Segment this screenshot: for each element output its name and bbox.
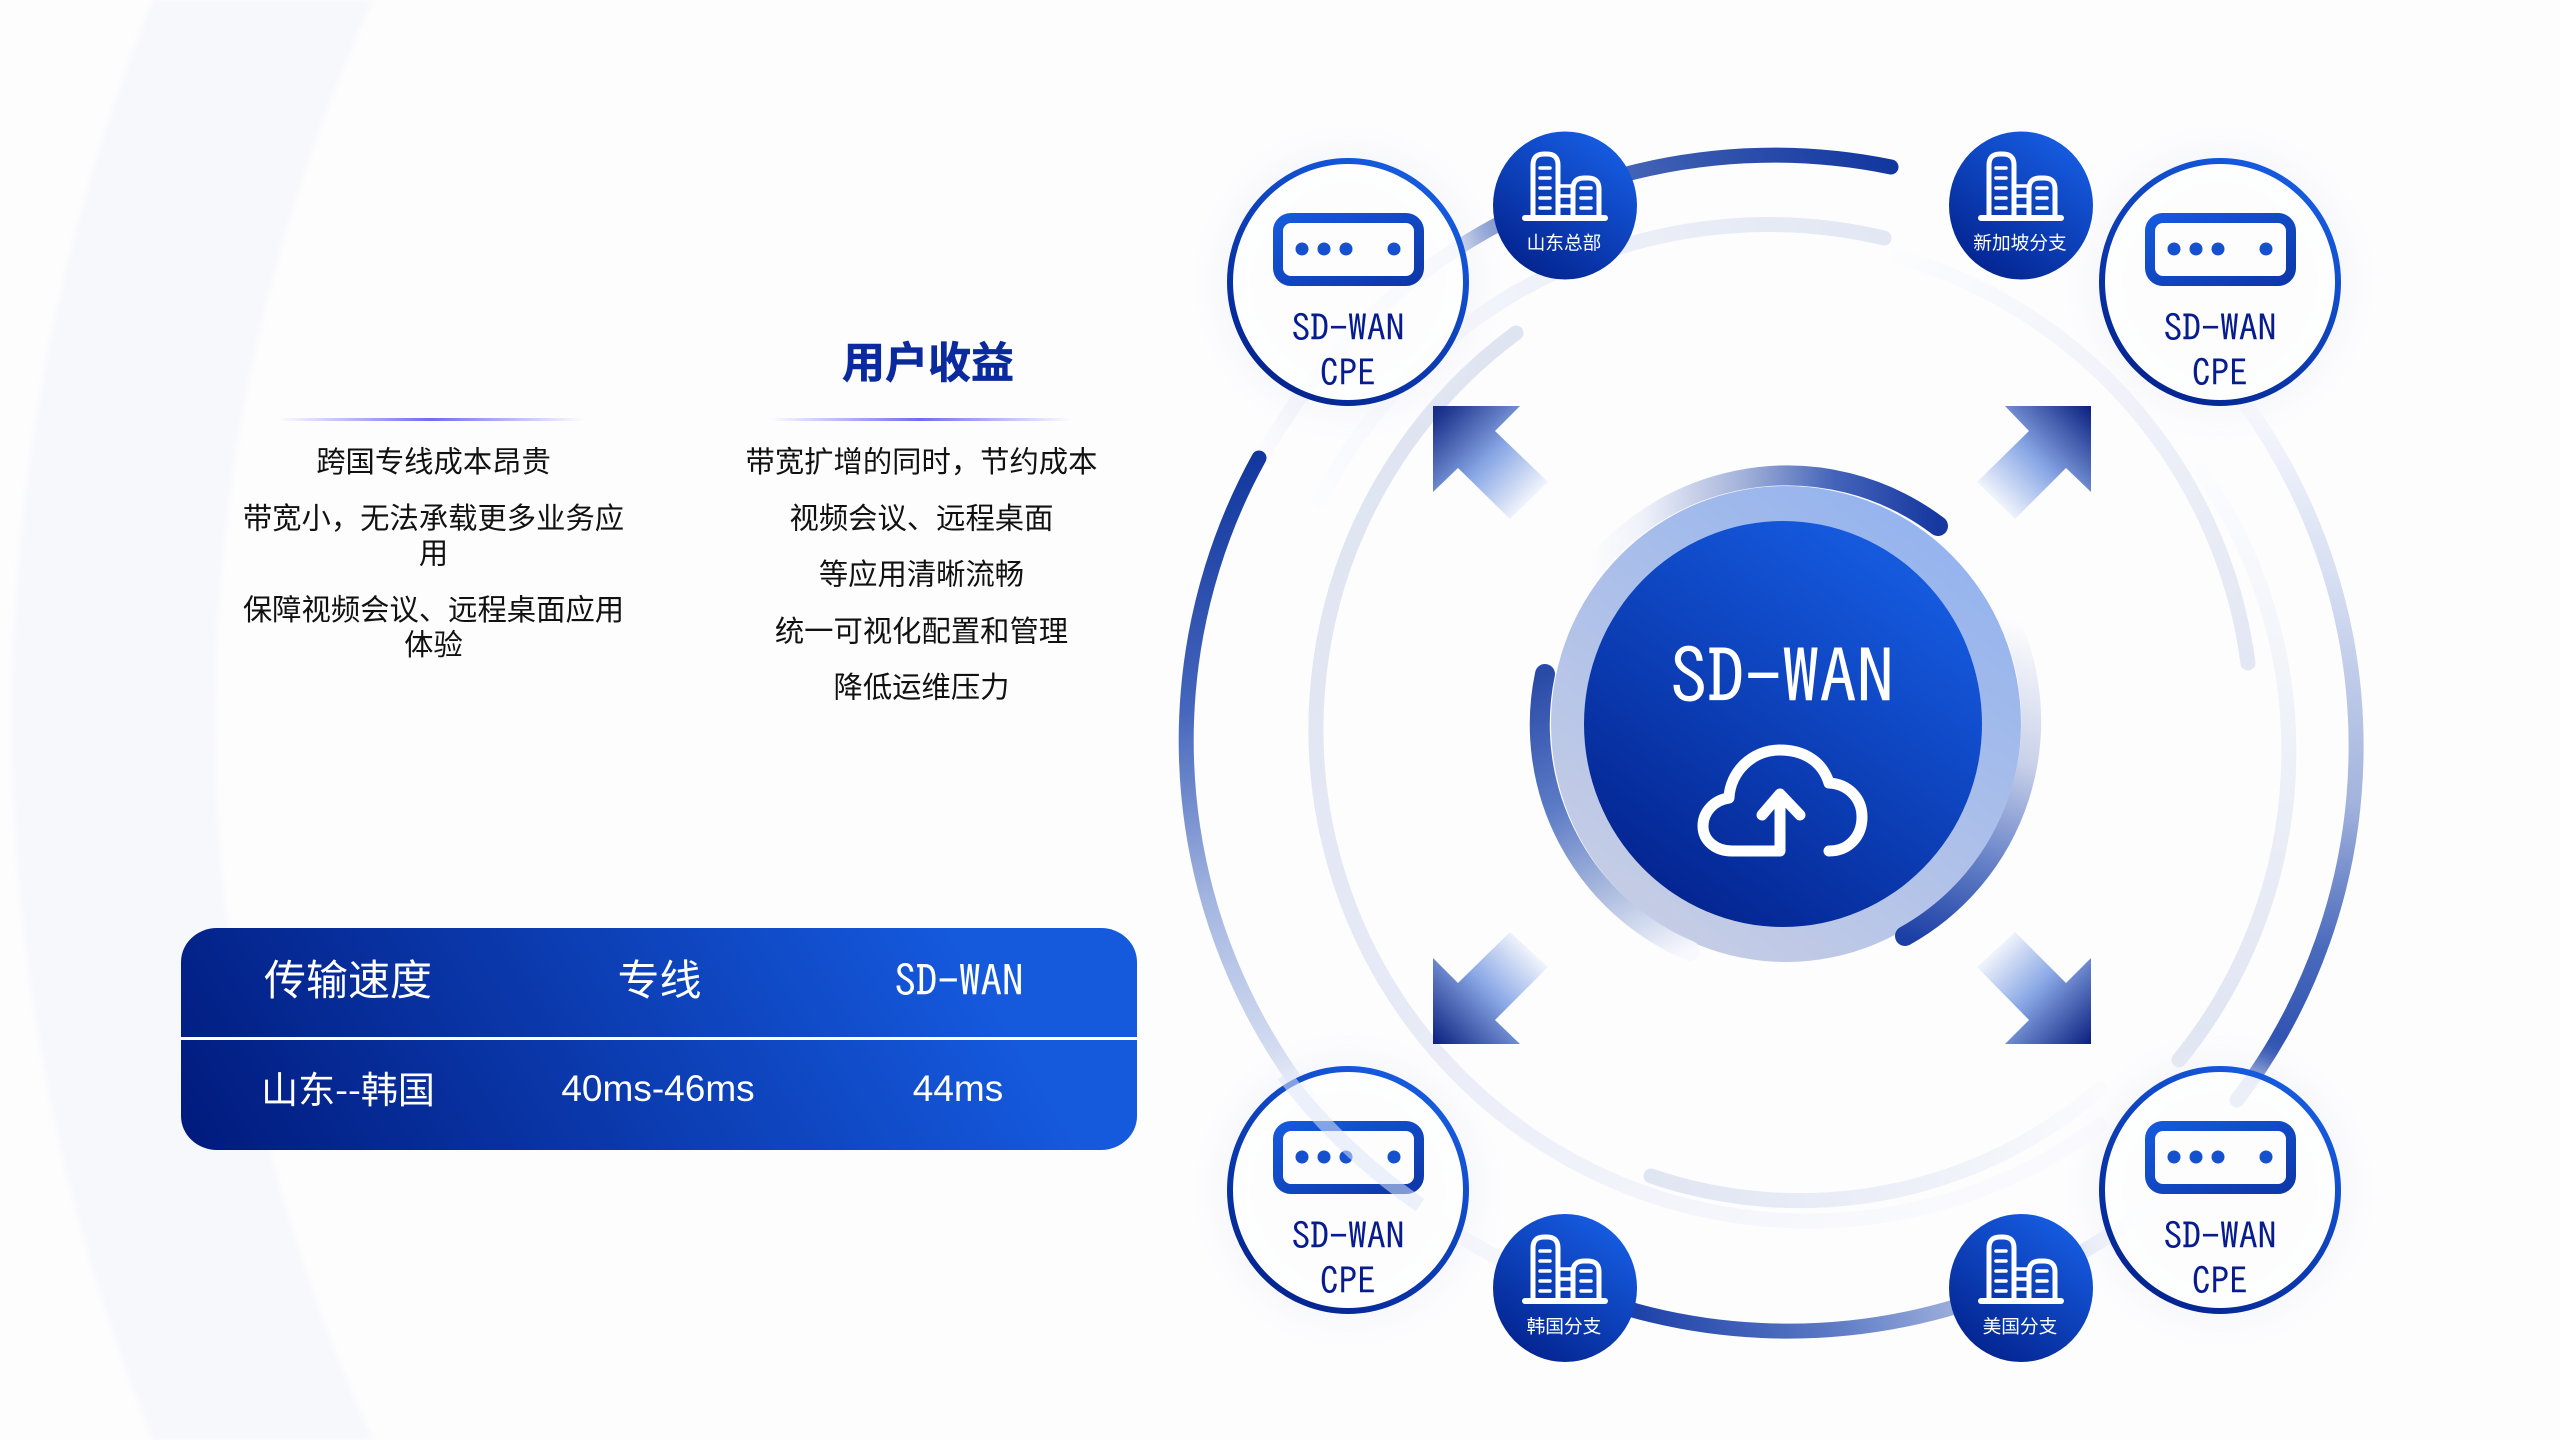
text block: user benefits: 降低运维压力 — [834, 664, 1009, 706]
table row: 山东--韩国 — [261, 1060, 435, 1114]
table row — [261, 1060, 1003, 1114]
text block: current pain points: 带宽小，无法承载更多业务应 — [243, 496, 624, 538]
arrow: bottom left — [1433, 932, 1548, 1044]
central SD-WAN hub — [1540, 475, 2031, 962]
CPE node: top right — [2088, 147, 2352, 417]
branch node: Singapore — [1949, 132, 2093, 280]
CPE node: bottom right — [2088, 1055, 2352, 1325]
table header: SD-WAN — [894, 960, 1024, 1002]
icon: router — [2150, 218, 2291, 281]
label — [2164, 309, 2276, 391]
branch node: USA — [1949, 1214, 2093, 1362]
table header: 专线 — [617, 947, 702, 1008]
background crescent — [12, 0, 373, 1440]
arrow: top left — [1433, 406, 1548, 519]
label: CPE — [1320, 1262, 1376, 1299]
text block: user benefits: 等应用清晰流畅 — [819, 552, 1024, 594]
table row: 40ms-46ms — [561, 1068, 755, 1109]
ring overlay crossing bottom-left CPE — [1284, 1075, 1420, 1205]
icon: cloud upload — [1703, 750, 1862, 851]
text block: user benefits: 统一可视化配置和管理 — [775, 608, 1068, 650]
icon: router — [1278, 218, 1419, 281]
label — [2164, 1217, 2276, 1299]
hub arc: left — [1540, 674, 1690, 951]
label: SD-WAN — [1292, 1217, 1404, 1254]
label — [1292, 309, 1404, 391]
icon: router — [2150, 1126, 2291, 1189]
branch node: Korea — [1493, 1214, 1637, 1362]
hub inner disc — [1584, 521, 1982, 927]
label: SD-WAN — [1292, 309, 1404, 346]
text block: current pain points: 保障视频会议、远程桌面应用 — [243, 587, 624, 629]
text block: user benefits: 视频会议、远程桌面 — [790, 496, 1053, 538]
branch node: Shandong HQ — [1493, 132, 1637, 280]
text block: user benefits: 带宽扩增的同时，节约成本 — [746, 439, 1097, 481]
label: 韩国分支 — [1527, 1312, 1602, 1339]
label: CPE — [1320, 354, 1376, 391]
table header: 传输速度 — [264, 947, 432, 1008]
heading: user benefits: 用户收益 — [842, 329, 1014, 391]
label: 新加坡分支 — [1973, 228, 2067, 256]
comparison table — [181, 928, 1137, 1150]
label: CPE — [2192, 1262, 2248, 1299]
hub label: SD-WAN — [1670, 639, 1894, 714]
icon: buildings — [1981, 1237, 2061, 1301]
CPE node: top left — [1216, 147, 1480, 417]
table row: 44ms — [913, 1068, 1003, 1109]
hub arc: right — [1905, 617, 2031, 936]
label — [1292, 1217, 1404, 1299]
label: SD-WAN — [2164, 1217, 2276, 1254]
text block: current pain points: 跨国专线成本昂贵 — [316, 439, 551, 481]
icon: router — [1278, 1126, 1419, 1189]
label: SD-WAN — [2164, 309, 2276, 346]
hub outer ring — [1551, 486, 2021, 962]
divider: right column — [769, 418, 1071, 421]
text block: current pain points: 用 — [419, 530, 448, 572]
label: 山东总部 — [1527, 228, 1601, 256]
arrow: bottom right — [1977, 932, 2091, 1044]
text block: user benefits — [746, 439, 1097, 706]
divider: left column — [278, 418, 584, 421]
text block: current pain points — [243, 439, 624, 664]
middle ring arcs — [1316, 225, 2289, 1221]
text block: current pain points: 体验 — [404, 622, 463, 664]
arrow: top right — [1977, 406, 2091, 519]
CPE node: bottom left — [1216, 1055, 1480, 1325]
outer ring arcs — [1186, 155, 2356, 1331]
hub arc: top — [1571, 475, 1938, 600]
icon: buildings — [1981, 154, 2061, 218]
icon: buildings — [1525, 1237, 1605, 1301]
table header — [264, 947, 1024, 1008]
icon: buildings — [1525, 154, 1605, 218]
label: 美国分支 — [1983, 1312, 2058, 1339]
label: CPE — [2192, 354, 2248, 391]
